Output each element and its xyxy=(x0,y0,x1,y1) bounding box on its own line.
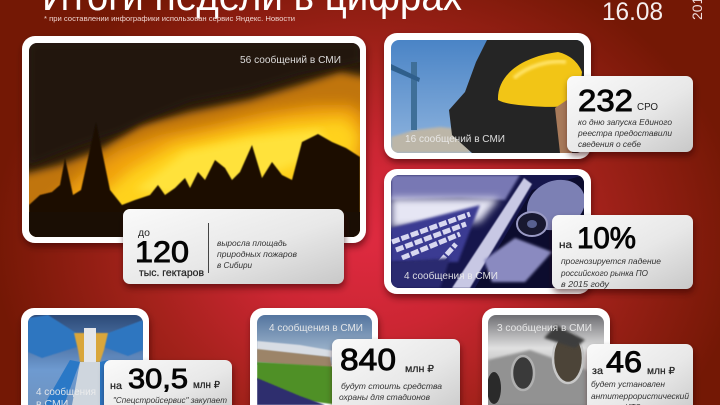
caption: 4 сообщения в СМИ xyxy=(269,322,363,334)
card: 840 mln: охраны для стадионов xyxy=(339,393,431,402)
card: 10 percent: на xyxy=(559,240,573,251)
image: worker with helmet xyxy=(391,40,584,153)
image: launch tower xyxy=(28,315,143,405)
card: 10 percent: в 2015 году xyxy=(561,280,610,289)
card: 30.5 mln: 30,5 xyxy=(128,363,188,394)
card: 10 percent: 10% xyxy=(577,222,636,255)
caption: 16 сообщений в СМИ xyxy=(405,133,505,145)
card: 10 percent: прогнозируется падение xyxy=(561,257,661,266)
image: aircraft engines xyxy=(487,315,604,405)
card: 840 mln xyxy=(332,339,460,405)
card: 232 SRO: СРО xyxy=(637,102,658,113)
panel: stadium xyxy=(250,308,378,405)
card: 120 thousand hectares: до xyxy=(138,227,150,239)
card: 46 mln: антитеррористический xyxy=(591,392,689,401)
card: 120 thousand hectares: выросла площадь xyxy=(217,239,287,248)
card: 46 mln: млн ₽ xyxy=(647,366,676,377)
card: 120 thousand hectares: тыс. гектаров xyxy=(139,268,204,279)
panel: software xyxy=(384,169,593,294)
card: 10 percent: российского рынка ПО xyxy=(560,269,649,278)
panel: wildfire xyxy=(20,36,370,243)
card: 232 SRO: ко дню запуска Единого xyxy=(578,118,672,127)
card: 120 thousand hectares xyxy=(123,209,344,284)
card: 840 mln: будут стоить средства xyxy=(341,382,442,391)
card: 30.5 mln xyxy=(104,360,232,405)
panel: engines xyxy=(482,308,610,405)
caption: 3 сообщения в СМИ xyxy=(497,322,592,334)
footnote: * при составлении инфографики использован сервис Яндекс. Новости xyxy=(44,14,295,23)
card: 30.5 mln: млн ₽ xyxy=(193,380,221,391)
card: 10 percent xyxy=(552,215,693,289)
image: laptop and disc xyxy=(391,171,593,288)
card: 30.5 mln: "Спецстройсервис" закупает xyxy=(113,396,227,405)
card: 46 mln xyxy=(587,344,693,405)
panel: launch tower xyxy=(21,308,149,405)
caption: 56 сообщений в СМИ xyxy=(240,54,341,66)
caption: 4 сообщения xyxy=(36,386,96,398)
card: 840 mln: млн ₽ xyxy=(405,364,435,375)
card: 840 mln: 840 xyxy=(340,342,396,377)
card: 232 SRO: 232 xyxy=(578,83,633,118)
card: 232 SRO: реестра предоставили xyxy=(577,129,672,138)
card: 30.5 mln: на xyxy=(110,381,122,392)
card: 120 thousand hectares: 120 xyxy=(135,236,189,269)
card: 46 mln: 46 xyxy=(606,346,642,379)
card: 120 thousand hectares: природных пожаров xyxy=(217,250,298,259)
card: 232 SRO: сведения о себе xyxy=(578,140,641,149)
image: burning forest xyxy=(20,43,370,240)
card: 232 SRO xyxy=(567,76,693,152)
image: stadium xyxy=(257,315,372,405)
caption: 4 сообщения в СМИ xyxy=(404,270,498,282)
panel: construction xyxy=(384,33,591,159)
card: 46 mln: будет установлен xyxy=(591,380,665,389)
card: 120 thousand hectares: в Сибири xyxy=(217,261,252,270)
card: 46 mln: за xyxy=(592,366,603,377)
